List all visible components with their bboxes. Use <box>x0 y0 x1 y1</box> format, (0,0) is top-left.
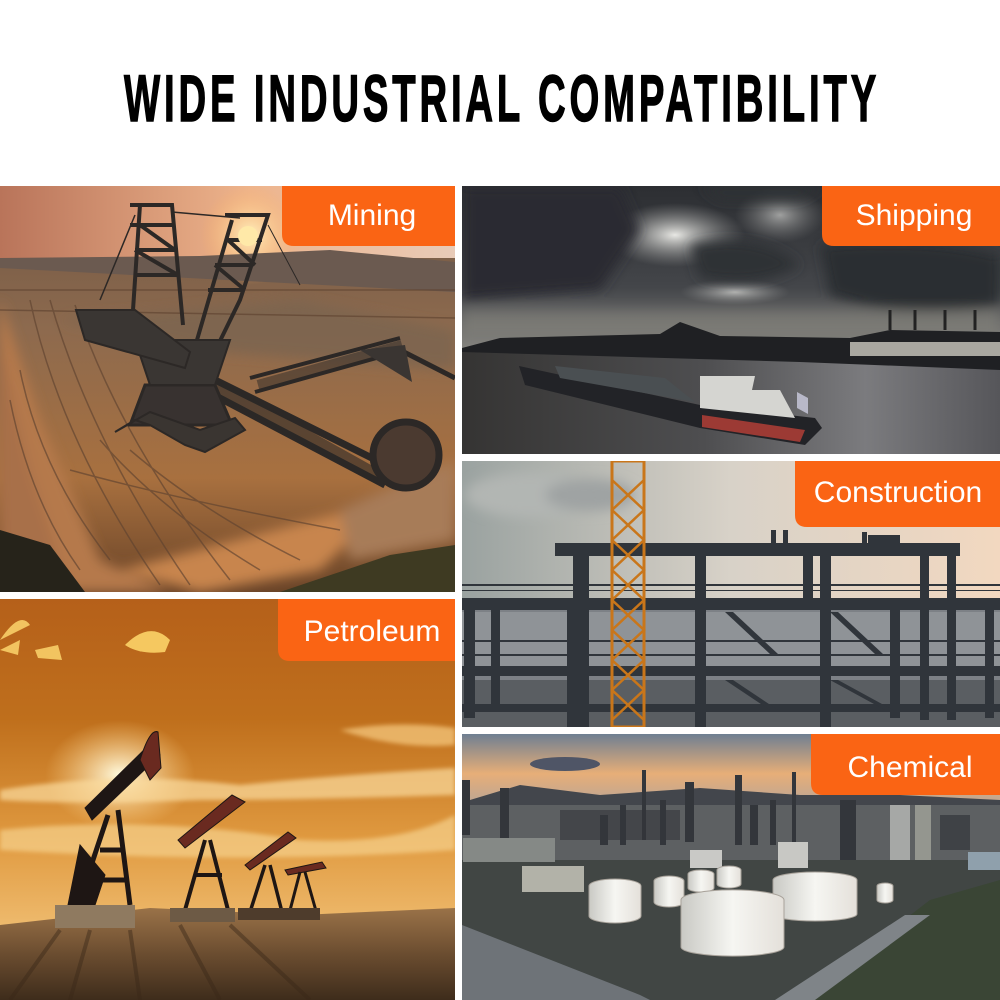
icon: bucket wheel excavator <box>76 205 455 488</box>
panel: mining <box>0 185 455 592</box>
icon: storage tanks <box>589 866 893 956</box>
panel: shipping <box>462 186 1000 454</box>
label: Mining <box>282 186 455 246</box>
icon: barge <box>519 366 822 445</box>
icon: pumpjacks <box>55 732 326 928</box>
panel: construction <box>462 461 1000 727</box>
title: WIDE INDUSTRIAL COMPATIBILITY <box>124 62 876 136</box>
panel: chemical <box>462 734 1000 1000</box>
label: Shipping: Shipping <box>856 199 972 232</box>
icon: tower crane <box>612 461 644 727</box>
icon: steel deck structure <box>462 530 1000 727</box>
label: Petroleum <box>278 599 455 661</box>
label: Shipping <box>822 186 1000 246</box>
label: Construction: Construction <box>814 476 982 509</box>
label: Mining: Mining <box>328 199 416 232</box>
label: Construction <box>795 461 1000 527</box>
label: Chemical: Chemical <box>847 751 973 784</box>
panel: petroleum <box>0 599 455 1000</box>
label: Chemical <box>811 734 1000 795</box>
label: Petroleum: Petroleum <box>304 615 440 648</box>
